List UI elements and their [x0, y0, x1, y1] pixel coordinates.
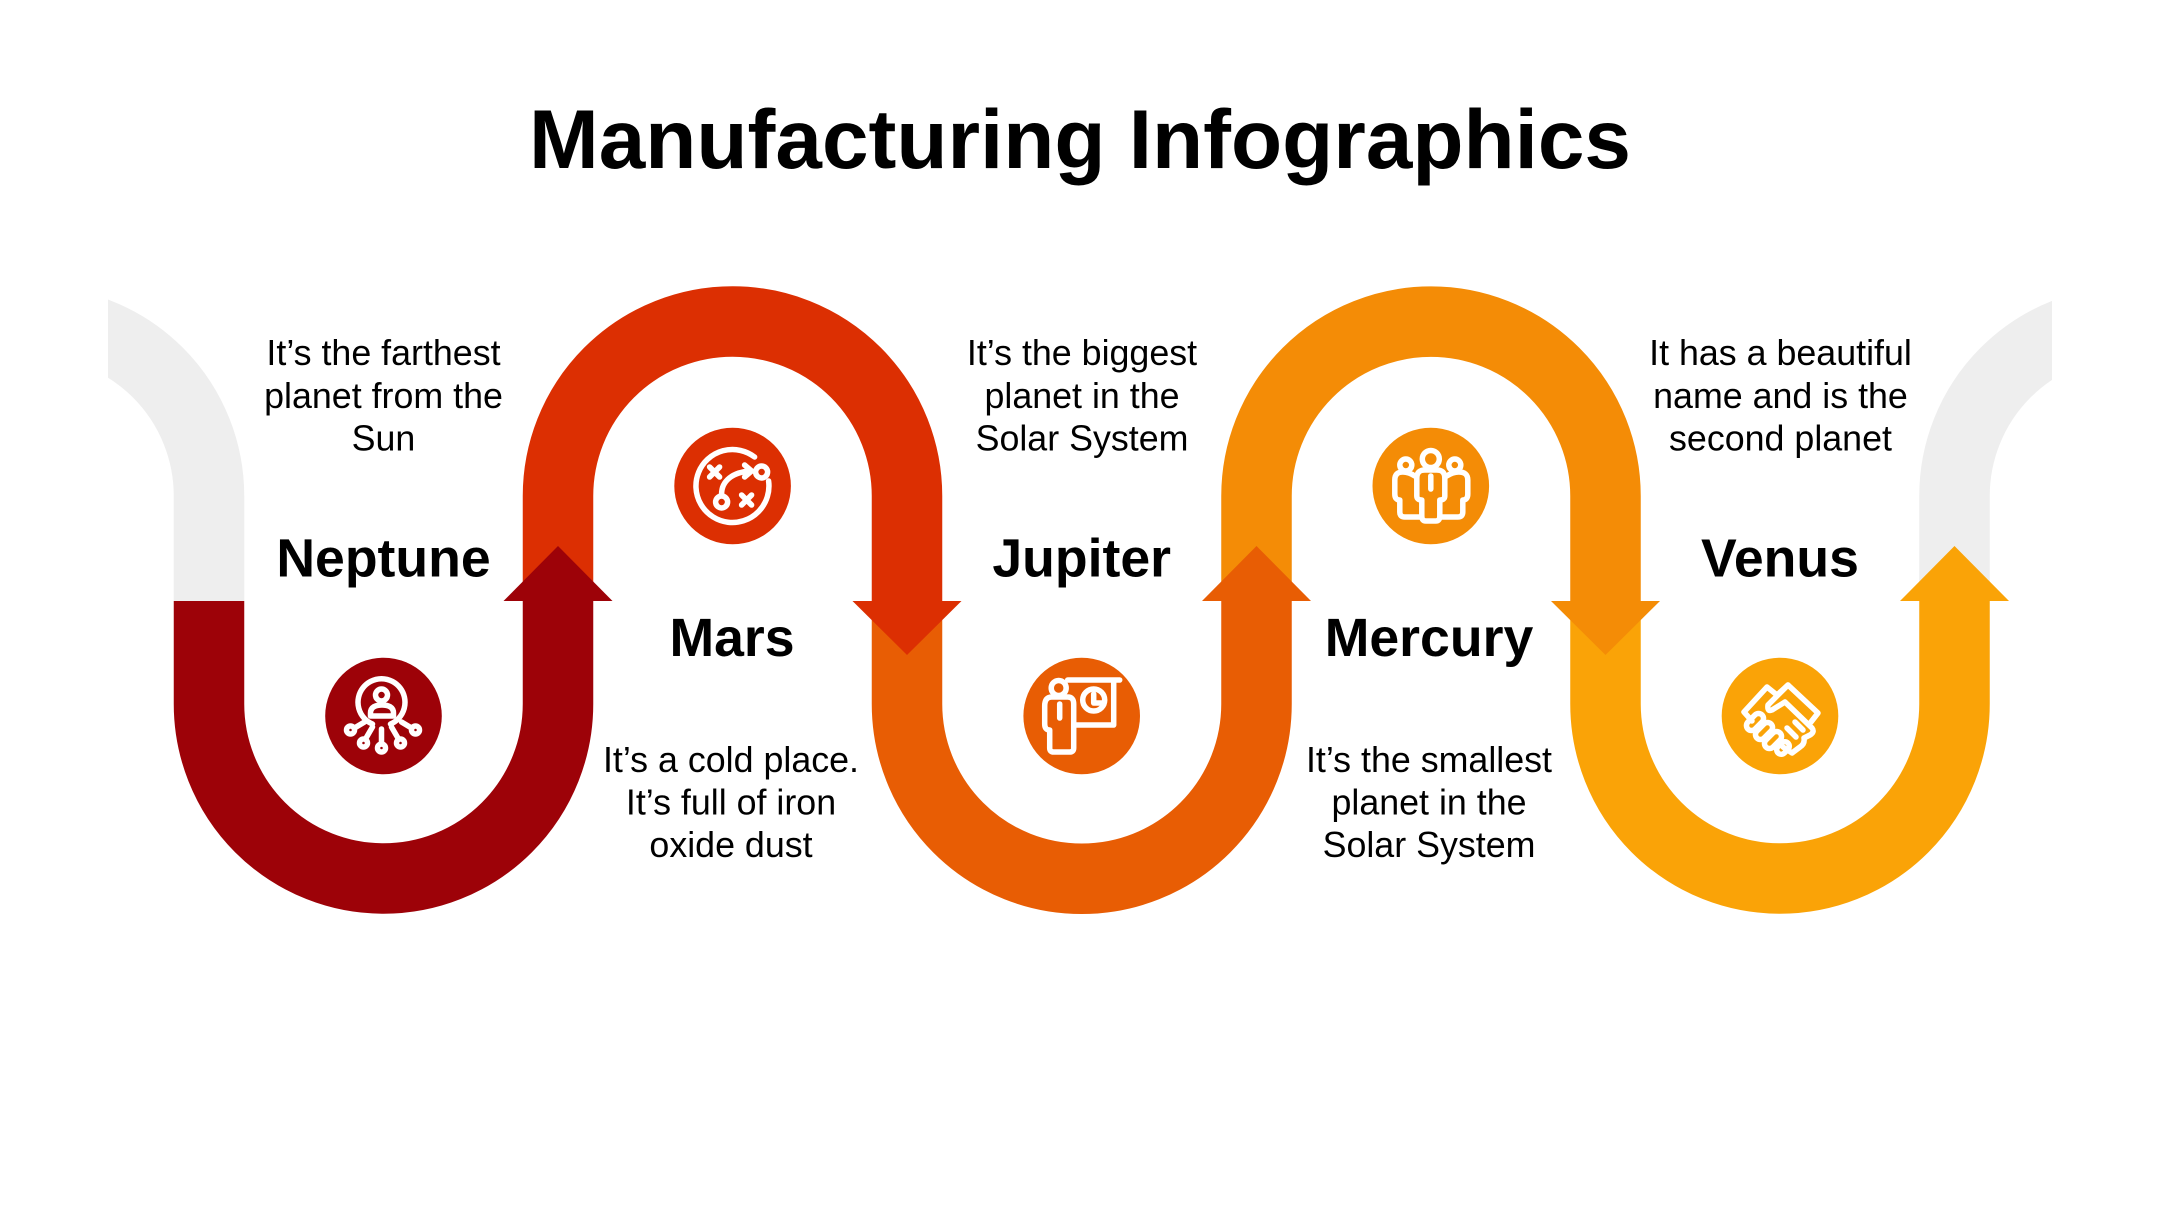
- Neptune description: planet from the: [264, 376, 503, 416]
- Mars description: It’s full of iron: [626, 782, 836, 822]
- icon: presenter with chart: [1023, 658, 1140, 774]
- icon: person network: [325, 658, 442, 774]
- Mars heading: Mars: [669, 608, 795, 668]
- ribbon segment: Jupiter, orange: [907, 546, 1311, 879]
- ribbon segment: Venus, yellow: [1606, 546, 2009, 879]
- Mercury description: planet in the: [1331, 782, 1527, 822]
- Neptune heading: Neptune: [276, 528, 491, 588]
- Jupiter description: Solar System: [976, 418, 1188, 458]
- Venus description: name and is the: [1653, 376, 1908, 416]
- Jupiter heading: Jupiter: [992, 528, 1171, 588]
- Venus description: It has a beautiful: [1649, 333, 1912, 373]
- Neptune description: It’s the farthest: [266, 333, 501, 373]
- Mars description: oxide dust: [649, 825, 813, 865]
- title: Manufacturing Infographics: [529, 92, 1631, 186]
- icon: team of people: [1372, 428, 1489, 544]
- ribbon start: grey: [108, 300, 244, 601]
- ribbon end: grey: [1919, 301, 2052, 582]
- Jupiter description: It’s the biggest: [967, 333, 1197, 373]
- ribbon segment: Neptune, dark red: [209, 546, 612, 879]
- Mercury heading: Mercury: [1325, 608, 1533, 668]
- Mars description: It’s a cold place.: [603, 740, 859, 780]
- Mercury description: It’s the smallest: [1306, 740, 1552, 780]
- panel: Mars: [603, 428, 859, 865]
- ribbon segment: Mars, red: [558, 322, 962, 655]
- panel: Venus: [1649, 333, 1912, 774]
- Mercury description: Solar System: [1323, 825, 1535, 865]
- panel: Jupiter: [967, 333, 1197, 774]
- Venus heading: Venus: [1701, 528, 1859, 588]
- icon: strategy play: [674, 428, 791, 544]
- ribbon segment: Mercury, amber: [1256, 322, 1660, 655]
- panel: Neptune: [264, 333, 503, 774]
- Jupiter description: planet in the: [984, 376, 1180, 416]
- Venus description: second planet: [1669, 418, 1892, 458]
- Neptune description: Sun: [352, 418, 415, 458]
- panel: Mercury: [1306, 428, 1552, 865]
- icon: handshake: [1722, 658, 1838, 774]
